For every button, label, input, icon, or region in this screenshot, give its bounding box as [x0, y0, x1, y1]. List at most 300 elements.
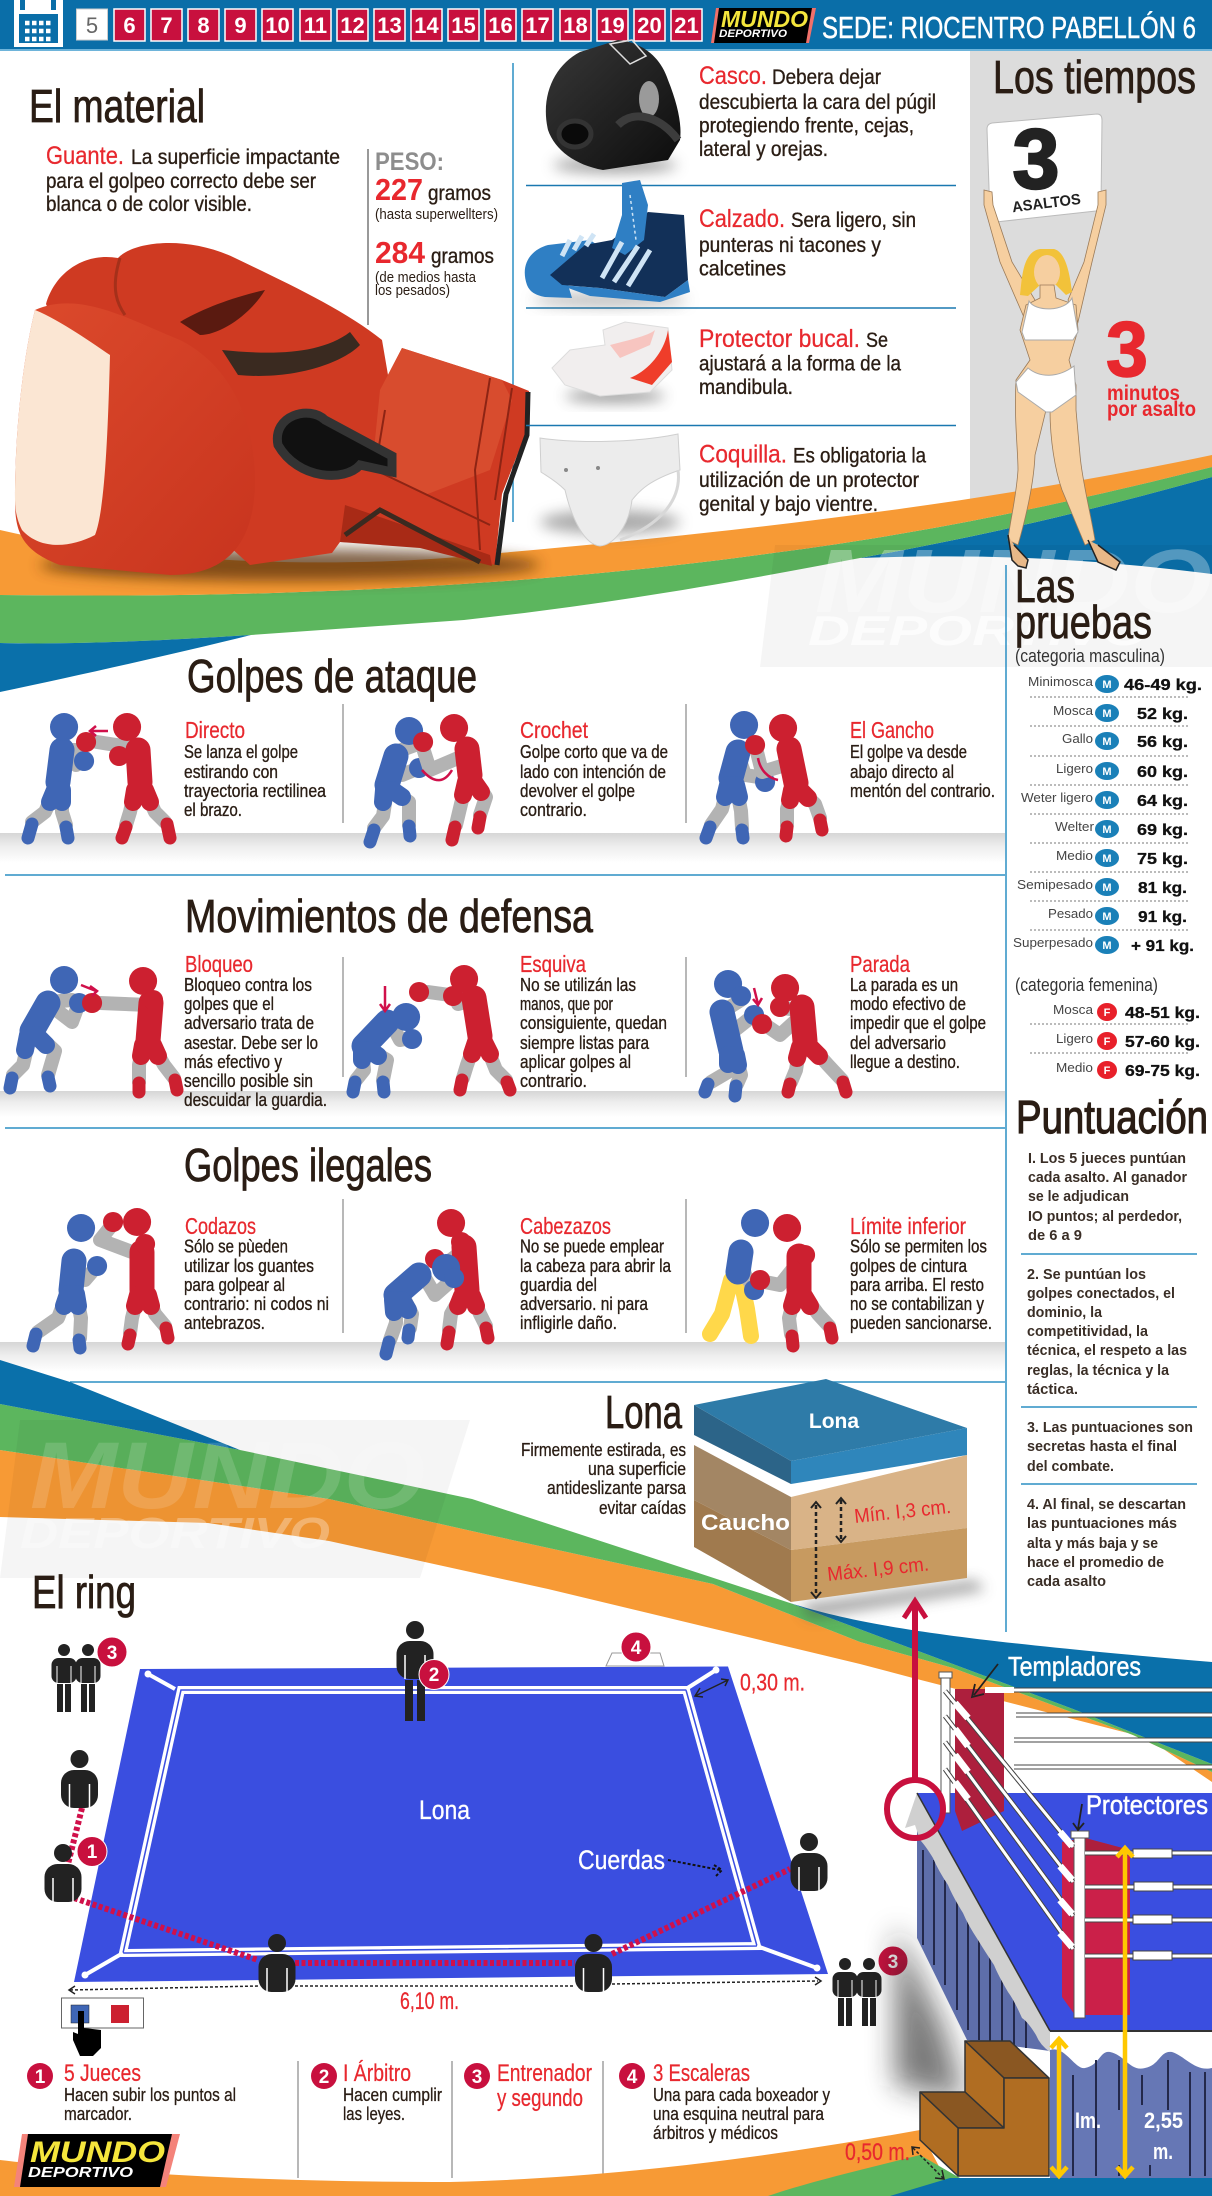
photo: boxing glove — [15, 243, 540, 581]
text block: puntuacion rules: alta y más baja y se — [1027, 1535, 1158, 1552]
list: categoria femenina: F — [1104, 1036, 1111, 1048]
ground band — [0, 833, 1005, 863]
list: categoria masculina: 91 kg. — [1138, 909, 1187, 926]
ground band — [0, 1091, 1005, 1117]
date boxes: 15 — [451, 13, 476, 38]
text block: lona description: antideslizante parsa — [547, 1478, 687, 1498]
text block: coquilla: Es obligatoria la — [793, 445, 926, 468]
sign: 3 asaltos: 3 — [1013, 112, 1059, 206]
text block: coquilla: Coquilla. — [699, 441, 787, 469]
bottom colour wave — [0, 2130, 1212, 2196]
corner post far — [939, 1672, 1004, 1831]
list: categoria masculina: 69 kg. — [1137, 822, 1188, 839]
figure: directo — [28, 726, 170, 838]
yellow height arrows — [1051, 1848, 1133, 2176]
list: categoria femenina: Medio — [1056, 1060, 1093, 1075]
text: cabezazos — [520, 1213, 672, 1333]
heading: Movimientos de defensa — [185, 890, 593, 942]
list: categoria femenina — [1015, 975, 1200, 1080]
heading: El material: El material — [29, 80, 205, 132]
text: limite inferior — [850, 1213, 992, 1333]
text: bloqueo: sencillo posible sin — [184, 1070, 313, 1091]
list: categoria masculina: M — [1102, 940, 1112, 952]
watermark lower — [0, 1420, 470, 1578]
text: cabezazos: Cabezazos — [520, 1213, 611, 1239]
line — [5, 875, 1005, 1382]
photo: helmet — [546, 40, 680, 173]
list: categoria masculina: 64 kg. — [1137, 793, 1188, 810]
label: Templadores: Templadores — [1008, 1652, 1141, 1682]
panel: los tiempos background — [970, 50, 1212, 510]
list: categoria masculina: (categoria masculina) — [1015, 646, 1165, 666]
text block: puntuacion rules: hace el promedio de — [1027, 1554, 1164, 1571]
heading: Golpes de ataque — [187, 650, 477, 702]
text: limite inferior: Límite inferior — [850, 1213, 966, 1239]
text block: puntuacion rules: 2. Se puntúan los — [1027, 1266, 1146, 1283]
dimension 6,10 m: 6,10 m. — [400, 1988, 459, 2015]
text: codazos: Codazos — [185, 1213, 256, 1239]
text: parada: Parada — [850, 951, 910, 977]
callout: 3 minutos por asalto: minutos — [1107, 382, 1180, 405]
text block: puntuacion rules: 3. Las puntuaciones son — [1027, 1419, 1193, 1436]
diagram: canvas layers block: Máx. I,9 cm. — [826, 1553, 930, 1586]
list: categoria femenina: F — [1104, 1065, 1111, 1077]
dimension 0,50 m: 0,50 m. — [845, 2139, 910, 2166]
text: el gancho: El Gancho — [850, 717, 934, 743]
figure: cabezazos — [386, 1223, 488, 1354]
text: esquiva: contrario. — [520, 1070, 587, 1091]
ground band — [0, 1342, 1005, 1372]
text block: guante: para el golpeo correcto debe ser — [46, 170, 316, 193]
list: categoria femenina: F — [1104, 1007, 1111, 1019]
watermark top: DEPORTIVO — [808, 607, 1148, 654]
text: crochet: Crochet — [520, 717, 589, 743]
label: Templadores — [972, 1652, 1141, 1697]
label: Protectores — [1073, 1790, 1208, 1830]
date boxes: 12 — [340, 13, 365, 38]
date boxes: 11 — [304, 13, 327, 38]
date boxes: 6 — [123, 13, 136, 38]
text block: guante: blanca o de color visible. — [46, 193, 252, 216]
legend item 4: árbitros y médicos — [653, 2123, 778, 2143]
diagram: ring plan: 1 — [87, 1842, 98, 1863]
top colour wave — [0, 455, 1212, 692]
line — [526, 186, 956, 426]
figure: esquiva — [353, 979, 510, 1092]
text: cabezazos: la cabeza para abrir la — [520, 1255, 672, 1276]
legend item 3: y segundo — [497, 2085, 583, 2112]
diagram: canvas layers block: Caucho — [701, 1510, 790, 1535]
arrow: detail circle to canvas block — [887, 1601, 943, 1838]
left skirt — [905, 1793, 1050, 2052]
list: categoria masculina: 60 kg. — [1137, 764, 1188, 781]
sign: 3 asaltos — [987, 112, 1102, 222]
coaches — [52, 1644, 882, 2026]
figure: crochet — [370, 728, 486, 842]
date boxes: 19 — [600, 13, 625, 38]
text: codazos: contrario: ni codos ni — [184, 1293, 329, 1314]
text: bloqueo: asestar. Debe ser lo — [184, 1032, 318, 1053]
text block: puntuacion rules: IO puntos; al perdedor, — [1028, 1208, 1182, 1225]
logo: Mundo Deportivo bottom — [14, 2134, 180, 2187]
ropes far — [985, 1690, 1212, 1767]
text block: puntuacion rules: 4. Al final, se descartan — [1027, 1496, 1186, 1513]
header bar — [0, 0, 1212, 51]
list: categoria femenina: Mosca — [1053, 1002, 1094, 1017]
text: esquiva: Esquiva — [520, 951, 586, 977]
text block: peso: PESO: — [375, 148, 444, 176]
scoreboard with hand — [62, 1998, 144, 2056]
legend item 4: Una para cada boxeador y — [653, 2085, 830, 2105]
ring platform — [917, 1793, 1212, 2031]
logo: Mundo Deportivo bottom: MUNDO — [30, 2136, 165, 2169]
text block: guante — [46, 142, 340, 216]
text: cabezazos: guardia del — [520, 1274, 597, 1295]
watermark top — [760, 532, 1212, 667]
text block: puntuacion rules: golpes conectados, el — [1027, 1285, 1175, 1302]
section: movimientos de defensa — [0, 890, 1005, 1117]
dimension 0,30 m: 0,30 m. — [740, 1670, 805, 1696]
text block: coquilla — [699, 441, 926, 516]
text block: puntuacion rules: dominio, la — [1027, 1304, 1103, 1321]
list: categoria masculina: M — [1102, 882, 1112, 894]
dimension 6,10 m — [69, 1977, 821, 2015]
watermark lower: MUNDO — [30, 1423, 425, 1529]
list: categoria masculina: M — [1102, 736, 1112, 748]
legend item 2: 2 — [319, 2067, 329, 2088]
text: directo: el brazo. — [184, 799, 242, 820]
list: categoria masculina: M — [1102, 766, 1112, 778]
heading: Golpes ilegales — [184, 1139, 432, 1191]
date boxes: 13 — [377, 13, 402, 38]
small table icon 4 — [606, 1653, 664, 1666]
text block: protector bucal: mandibula. — [699, 376, 793, 399]
lower colour wave — [0, 1360, 1212, 1782]
legend item 2 — [311, 2060, 442, 2124]
dimension 0,50 m — [845, 2139, 944, 2179]
shadow — [895, 1925, 965, 2100]
diagram: canvas layers block — [694, 1379, 985, 1618]
text block: peso: (de medios hasta — [375, 269, 477, 286]
text block: calzado — [699, 205, 916, 281]
list: categoria femenina: 57-60 kg. — [1125, 1034, 1200, 1051]
text block: casco: Casco. — [699, 62, 767, 90]
list: categoria masculina: Welter — [1055, 819, 1095, 834]
text block: peso: 227 — [375, 172, 423, 207]
text block: casco: descubierta la cara del púgil — [699, 91, 936, 114]
legend item 2: Hacen cumplir — [343, 2085, 442, 2105]
callout: 3 minutos por asalto: 3 — [1106, 305, 1148, 393]
arrow: cuerdas — [668, 1860, 722, 1876]
watermark lower: DEPORTIVO — [20, 1509, 330, 1558]
date boxes: 5 — [86, 13, 98, 38]
stairs — [920, 2041, 1049, 2176]
legend item 1: Hacen subir los puntos al — [64, 2085, 236, 2105]
text block: puntuacion rules: reglas, la técnica y la — [1027, 1362, 1170, 1379]
text block: calzado: punteras ni tacones y — [699, 234, 881, 257]
legend — [27, 2060, 830, 2178]
photo: boots — [525, 180, 690, 306]
text: esquiva: consiguiente, quedan — [520, 1012, 667, 1033]
text block: peso: (hasta superwellters) — [375, 206, 498, 223]
diagram: ring plan: 4 — [631, 1638, 642, 1659]
text: parada: impedir que el golpe — [850, 1012, 986, 1033]
list: categoria masculina: 52 kg. — [1137, 706, 1188, 723]
text block: puntuacion rules: del combate. — [1027, 1458, 1114, 1475]
list: categoria masculina: M — [1102, 911, 1112, 923]
judges — [44, 1750, 828, 1992]
callout: 3 minutos por asalto: por asalto — [1107, 398, 1196, 421]
list: categoria masculina: M — [1102, 708, 1112, 720]
text: el gancho: mentón del contrario. — [850, 780, 995, 801]
date boxes: 9 — [234, 13, 247, 38]
list: categoria masculina: Mosca — [1053, 703, 1094, 718]
text: bloqueo: Bloqueo — [185, 951, 253, 977]
text: bloqueo: más efectivo y — [184, 1051, 283, 1072]
text: esquiva: aplicar golpes al — [520, 1051, 631, 1072]
diagram: ring side elevation — [845, 1601, 1212, 2179]
legend item 1 — [27, 2060, 236, 2124]
legend item 4: 3 Escaleras — [653, 2060, 750, 2087]
list: categoria masculina: M — [1102, 853, 1112, 865]
text: directo: estirando con — [184, 761, 278, 782]
text: parada: La parada es un — [850, 974, 958, 995]
photo: mouth guard — [552, 322, 672, 402]
text block: peso: gramos — [428, 182, 491, 205]
text: cabezazos: adversario. ni para — [520, 1293, 649, 1314]
text: el gancho: abajo directo al — [850, 761, 954, 782]
text: esquiva: siempre listas para — [520, 1032, 650, 1053]
text: esquiva — [520, 951, 667, 1091]
list: categoria femenina: 48-51 kg. — [1125, 1005, 1200, 1022]
text: crochet — [520, 717, 668, 820]
date boxes — [76, 9, 702, 41]
list: categoria masculina: Semipesado — [1017, 877, 1093, 892]
date boxes: 16 — [488, 13, 513, 38]
text block: puntuacion rules: de 6 a 9 — [1028, 1227, 1082, 1244]
list: categoria masculina: 56 kg. — [1137, 734, 1188, 751]
diagram: ring plan: 3 — [888, 1952, 898, 1973]
heading: Las pruebas: pruebas — [1015, 596, 1152, 648]
list: categoria masculina: 81 kg. — [1138, 880, 1187, 897]
text: crochet: contrario. — [520, 799, 587, 820]
figure: parada — [705, 984, 846, 1096]
text: parada: modo efectivo de — [850, 993, 966, 1014]
legend item 2: las leyes. — [343, 2104, 405, 2124]
list: categoria masculina: Superpesado — [1013, 935, 1093, 950]
text: directo: Se lanza el golpe — [184, 741, 298, 762]
judges line — [68, 1808, 790, 1963]
text block: peso: gramos — [431, 245, 494, 268]
date boxes: 17 — [525, 13, 550, 38]
heading: Las pruebas: Las — [1015, 560, 1075, 612]
diagram: ring plan: 2 — [429, 1665, 439, 1686]
text: limite inferior: pueden sancionarse. — [850, 1312, 992, 1333]
text block: lona description: evitar caídas — [599, 1498, 686, 1518]
text block: lona description: Firmemente estirada, es — [521, 1440, 686, 1460]
illustration: ring girl with sign — [984, 112, 1120, 570]
figure: el gancho — [706, 725, 822, 838]
text: esquiva: manos, que por — [520, 993, 613, 1014]
text: cabezazos: No se puede emplear — [520, 1236, 664, 1256]
text: limite inferior: no se contabilizan y — [850, 1293, 985, 1314]
text block: puntuacion rules: secretas hasta el final — [1027, 1438, 1177, 1455]
text: codazos: utilizar los guantes — [184, 1255, 314, 1276]
heading: Lona: Lona — [605, 1386, 682, 1438]
text block: calzado: Calzado. — [699, 205, 785, 233]
labels: heights: m. — [1153, 2139, 1173, 2164]
text: directo — [184, 717, 327, 820]
column divider — [1005, 565, 1007, 1632]
dimension 0,30 m — [695, 1670, 805, 1697]
text block: puntuacion rules: las puntuaciones más — [1027, 1515, 1177, 1532]
text: bloqueo: Bloqueo contra los — [184, 974, 312, 995]
text: parada: del adversario — [850, 1032, 946, 1053]
figure: codazos — [33, 1222, 168, 1348]
watermark top: MUNDO — [815, 532, 1212, 632]
legend item 3: Entrenador — [497, 2060, 592, 2087]
text block: lona description — [521, 1440, 687, 1518]
ropes diagonal — [945, 1691, 1073, 1949]
text: cabezazos: infligirle daño. — [520, 1312, 617, 1333]
text: limite inferior: golpes de cintura — [850, 1255, 968, 1276]
figure: limite inferior — [710, 1223, 832, 1346]
date boxes: 8 — [197, 13, 210, 38]
text block: coquilla: genital y bajo vientre. — [699, 493, 878, 516]
label: Cuerdas: Cuerdas — [578, 1845, 665, 1875]
list: categoria femenina: 69-75 kg. — [1125, 1063, 1200, 1080]
text: bloqueo — [184, 951, 327, 1110]
date boxes: 21 — [674, 13, 699, 38]
date boxes: 10 — [265, 13, 290, 38]
labels: heights: Im. — [1075, 2108, 1101, 2133]
callout: 3 minutos por asalto — [1106, 305, 1196, 421]
text block: puntuacion rules: táctica. — [1027, 1381, 1078, 1398]
section: golpes ilegales — [0, 1139, 1005, 1372]
list: categoria masculina: M — [1102, 795, 1112, 807]
text block: casco: Debera dejar — [772, 66, 881, 89]
legend item 3: 3 — [472, 2067, 482, 2088]
heading: El ring: El ring — [32, 1566, 136, 1618]
list: categoria masculina: Gallo — [1062, 731, 1093, 746]
list: categoria masculina — [1013, 646, 1202, 955]
front skirt — [917, 1793, 1212, 2178]
list: categoria masculina: 75 kg. — [1137, 851, 1188, 868]
text: limite inferior: para arriba. El resto — [850, 1274, 984, 1295]
logo: Mundo Deportivo — [711, 6, 816, 43]
list: categoria masculina: Weter ligero — [1021, 790, 1093, 805]
legend item 1: marcador. — [64, 2104, 132, 2124]
text: directo: trayectoria rectilinea — [184, 780, 327, 801]
text block: peso — [375, 148, 498, 299]
text: codazos: Sólo se pùeden — [184, 1236, 288, 1256]
text block: puntuacion rules: técnica, el respeto a las — [1027, 1342, 1187, 1359]
date boxes: 14 — [414, 13, 439, 38]
legend item 2: I Árbitro — [343, 2060, 411, 2087]
text block: calzado: Sera ligero, sin — [791, 209, 916, 232]
diagram: ring plan: 3 — [107, 1643, 117, 1664]
text block: protector bucal: Se — [866, 329, 888, 352]
text: bloqueo: adversario trata de — [184, 1012, 314, 1033]
text block: puntuacion rules: cada asalto. Al ganador — [1028, 1169, 1187, 1186]
section: golpes de ataque — [0, 650, 1005, 863]
text block: puntuacion rules: cada asalto — [1027, 1573, 1106, 1590]
logo: Mundo Deportivo: DEPORTIVO — [719, 28, 787, 40]
text block: casco: lateral y orejas. — [699, 138, 828, 161]
logo: Mundo Deportivo: MUNDO — [721, 6, 808, 32]
text: crochet: Golpe corto que va de — [520, 741, 668, 762]
badges — [77, 1632, 908, 1976]
text block: guante: Guante. — [46, 142, 124, 170]
text: parada — [850, 951, 986, 1072]
text block: coquilla: utilización de un protector — [699, 469, 919, 492]
text: directo: Directo — [185, 717, 245, 743]
text block: peso: los pesados) — [375, 282, 450, 299]
list: categoria masculina: Minimosca — [1028, 674, 1094, 689]
text: bloqueo: golpes que el — [184, 993, 274, 1014]
list: categoria masculina: 46-49 kg. — [1124, 677, 1202, 694]
figure: bloqueo — [10, 980, 177, 1092]
ropes right — [1085, 1849, 1212, 1960]
text block: puntuacion rules: se le adjudican — [1028, 1188, 1129, 1205]
legend item 4: 4 — [627, 2067, 638, 2088]
corner post near — [1062, 1831, 1130, 2018]
text: crochet: devolver el golpe — [520, 780, 635, 801]
text block: guante: La superficie impactante — [131, 146, 340, 169]
list: categoria masculina: Medio — [1056, 848, 1093, 863]
text block: lona description: una superficie — [588, 1459, 686, 1479]
text: crochet: lado con intención de — [520, 761, 666, 782]
label: Lona: Lona — [419, 1795, 471, 1825]
text block: puntuacion rules: competitividad, la — [1027, 1323, 1149, 1340]
text block: puntuacion rules — [1021, 1150, 1197, 1590]
diagram: ring plan — [44, 1621, 908, 2056]
referee — [396, 1621, 434, 1721]
text: parada: llegue a destino. — [850, 1051, 960, 1072]
list: categoria masculina: M — [1102, 824, 1112, 836]
text block: peso: 284 — [375, 235, 426, 270]
text: el gancho: El golpe va desde — [850, 741, 967, 762]
list: categoria masculina: M — [1102, 679, 1112, 691]
labels: heights — [1075, 2108, 1183, 2164]
text: bloqueo: descuidar la guardia. — [184, 1089, 327, 1110]
list: categoria femenina: Ligero — [1056, 1031, 1093, 1046]
text: el gancho — [850, 717, 995, 801]
diagram: canvas layers block: Lona — [809, 1410, 859, 1433]
text block: puntuacion rules: I. Los 5 jueces puntúan — [1028, 1150, 1186, 1167]
ropes — [82, 1667, 820, 1978]
text: limite inferior: Sólo se permiten los — [850, 1236, 987, 1256]
heading: Las pruebas — [1015, 560, 1152, 648]
icon: calendar — [14, 0, 63, 47]
text: codazos — [184, 1213, 329, 1333]
list: categoria masculina: Ligero — [1056, 761, 1093, 776]
legend item 1: 5 Jueces — [64, 2060, 141, 2087]
date boxes: 20 — [637, 13, 662, 38]
text block: casco: protegiendo frente, cejas, — [699, 114, 914, 138]
sign: 3 asaltos: ASALTOS — [1011, 191, 1082, 216]
list: categoria masculina: Pesado — [1048, 906, 1093, 921]
text block: protector bucal: Protector bucal. — [699, 325, 860, 353]
text block: casco — [699, 62, 936, 161]
legend item 4 — [619, 2060, 830, 2143]
text block: calzado: calcetines — [699, 258, 786, 281]
date boxes: 18 — [563, 13, 588, 38]
date boxes: 7 — [160, 13, 173, 38]
text block: protector bucal — [699, 325, 901, 399]
text block: protector bucal: ajustará a la forma de la — [699, 352, 901, 376]
diagram: canvas layers block: Mín. I,3 cm. — [853, 1496, 952, 1528]
